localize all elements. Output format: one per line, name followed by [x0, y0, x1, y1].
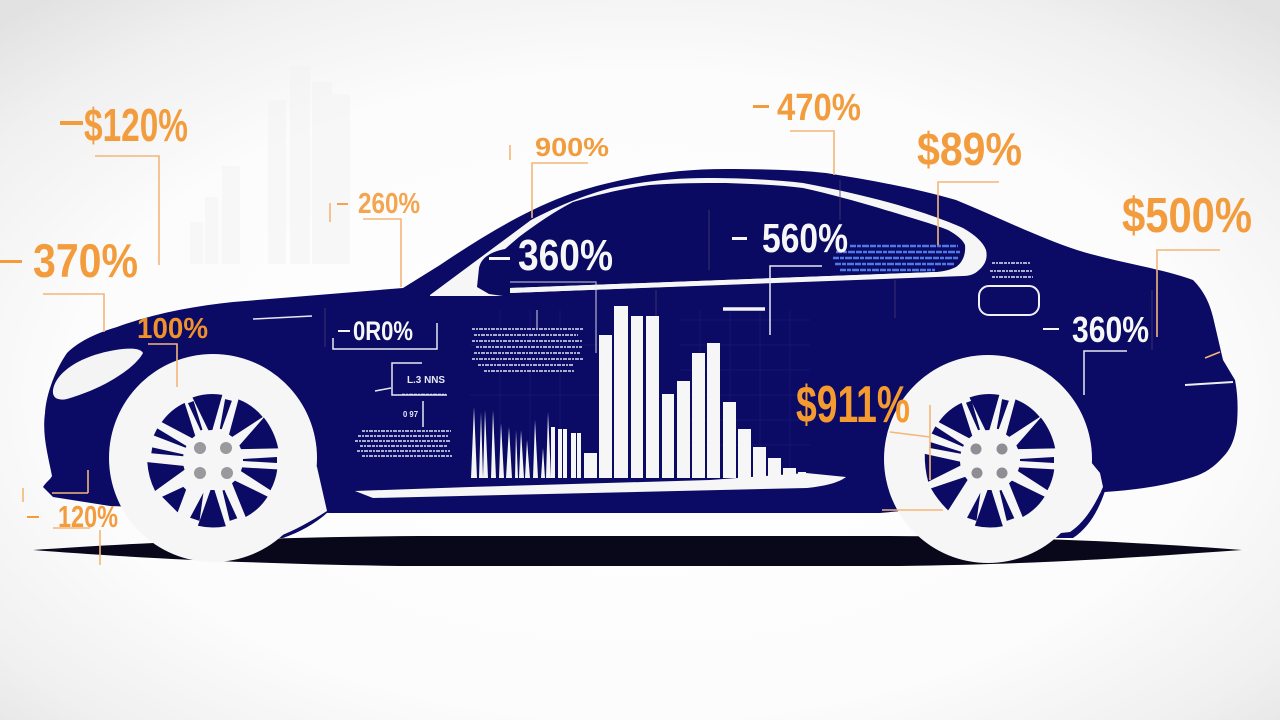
label: -260%	[337, 188, 420, 220]
label: -360% window: 360%	[518, 231, 613, 280]
label: 900%: 900%	[535, 132, 609, 162]
chart spikes	[471, 407, 555, 478]
label: 100%: 100%	[137, 313, 208, 345]
rear wheel bolts	[970, 444, 1008, 478]
label: -$120%	[60, 99, 188, 151]
diagram lines	[375, 363, 447, 427]
label: -560% window: 560%	[762, 215, 848, 261]
front tyre	[109, 354, 317, 562]
car	[43, 169, 1238, 563]
label: bottom left	[27, 499, 118, 534]
label: -$120%: $120%	[84, 99, 188, 151]
rear rim spokes	[924, 393, 1057, 528]
left diagram	[355, 363, 452, 456]
rear lower skirt	[1050, 491, 1105, 538]
label: -360% rear	[1043, 309, 1149, 350]
ground shadow	[33, 536, 1242, 566]
car body	[43, 169, 1238, 513]
orange connector lines	[23, 131, 1220, 565]
label: -360% window	[489, 231, 613, 280]
bar chart	[355, 306, 846, 498]
window lower strip	[510, 272, 945, 293]
label: $89%: $89%	[917, 123, 1022, 175]
label: $911%: $911%	[796, 376, 910, 434]
window frame	[430, 178, 987, 296]
blue window text lines	[833, 246, 960, 270]
front lower skirt	[262, 505, 328, 538]
white connector lines	[253, 180, 1233, 395]
faint background bar chart	[190, 66, 350, 264]
body grid	[470, 310, 810, 470]
label: -360% rear: 360%	[1072, 309, 1149, 350]
front fender white	[220, 400, 327, 540]
label: -470%	[753, 87, 861, 129]
label: -370%	[0, 234, 138, 287]
diagram label: L.3 NNS	[407, 375, 445, 386]
left text block	[355, 431, 452, 456]
label: -470%: 470%	[777, 87, 861, 129]
front wheel bolts	[194, 442, 233, 479]
diagram small label: 0 97	[403, 410, 419, 419]
label: bottom left: 120%	[58, 499, 118, 534]
window glass	[477, 183, 965, 297]
headlight	[53, 349, 143, 400]
chart base sweep	[355, 473, 846, 498]
diagram dashed bar	[402, 394, 446, 396]
label: $500%: $500%	[1122, 189, 1252, 243]
rear badge	[979, 263, 1039, 315]
label: -0R0%	[338, 316, 413, 346]
label: -260%: 260%	[358, 188, 420, 220]
rear wheel	[884, 355, 1092, 563]
centre text block	[472, 329, 584, 371]
label: -0R0%: 0R0%	[353, 316, 413, 346]
rear tyre	[884, 355, 1092, 563]
windows	[430, 178, 987, 297]
rounded outline	[979, 286, 1039, 315]
label: -370%: 370%	[33, 234, 138, 287]
front rim spokes	[146, 393, 280, 528]
badge small text lines	[990, 263, 1033, 277]
chart bars	[558, 306, 806, 478]
front wheel	[109, 354, 317, 562]
rear fender white	[1000, 400, 1103, 540]
label: -560% window	[732, 215, 848, 261]
